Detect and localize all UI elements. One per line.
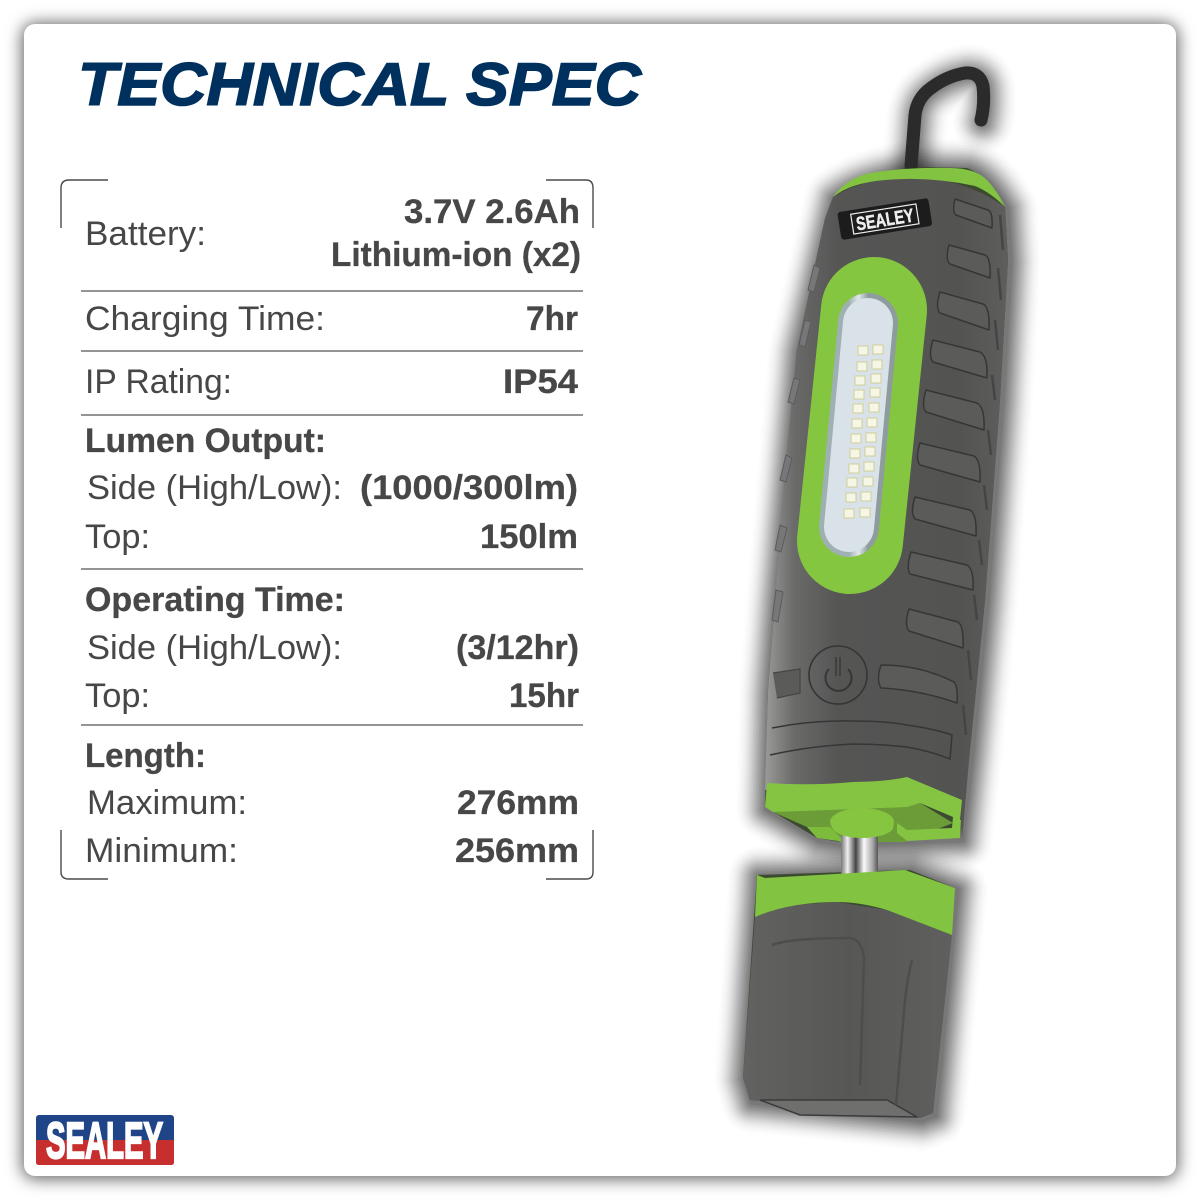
title: TECHNICAL SPEC [78, 51, 643, 118]
row: charging time: Charging Time: [85, 300, 325, 338]
row: lumen output [85, 422, 578, 556]
row: length: Maximum: [87, 784, 247, 822]
row: lumen output: Lumen Output: [85, 422, 326, 460]
row: charging time [85, 300, 578, 338]
row: charging time: 7hr [526, 300, 578, 338]
panel: specification table [61, 180, 593, 879]
product photo: inspection lamp [36, 73, 1010, 1169]
row: operating time: Side (High/Low): [87, 629, 342, 667]
row: lumen output: 150lm [480, 518, 578, 556]
row: operating time: Top: [85, 677, 150, 715]
row: battery: Lithium-ion (x2) [331, 236, 581, 274]
lamp shadow [745, 75, 1010, 1120]
row: operating time: 15hr [509, 677, 579, 715]
corner brackets [61, 180, 593, 879]
battery base [743, 870, 955, 1118]
green light surround [850, 310, 874, 541]
green top cap [833, 168, 1005, 207]
row: operating time: (3/12hr) [456, 629, 579, 667]
lamp body [743, 168, 1008, 1118]
row: battery [85, 193, 581, 274]
row: length [85, 737, 579, 870]
row: length: Length: [85, 737, 206, 775]
green lower collar [765, 777, 962, 842]
light lens [844, 323, 883, 527]
chrome swivel post [841, 830, 878, 876]
logo: Sealey: SEALEY [46, 1112, 163, 1169]
row: lumen output: Side (High/Low): [87, 469, 342, 507]
hook [911, 73, 984, 166]
row: operating time [85, 581, 579, 715]
row: operating time: Operating Time: [85, 581, 345, 619]
LED array [844, 345, 883, 518]
row: lumen output: Top: [85, 518, 150, 556]
row: battery: 3.7V 2.6Ah [404, 193, 580, 231]
sealey badge [837, 198, 932, 240]
lamp silhouette underlay [743, 167, 1008, 1118]
power button [809, 646, 867, 704]
row: battery: Battery: [85, 215, 206, 253]
sealey badge: SEALEY [855, 206, 916, 235]
logo: Sealey [36, 1112, 174, 1169]
row: lumen output: (1000/300lm) [360, 469, 578, 507]
row: length: 256mm [455, 832, 579, 870]
green battery band [755, 870, 955, 935]
grip ribs [770, 199, 1003, 759]
row: IP rating: IP Rating: [85, 363, 232, 401]
row: length: 276mm [457, 784, 579, 822]
row: IP rating: IP54 [503, 363, 578, 401]
swivel collar [830, 808, 894, 838]
row: length: Minimum: [85, 832, 238, 870]
row: IP rating [85, 363, 578, 401]
